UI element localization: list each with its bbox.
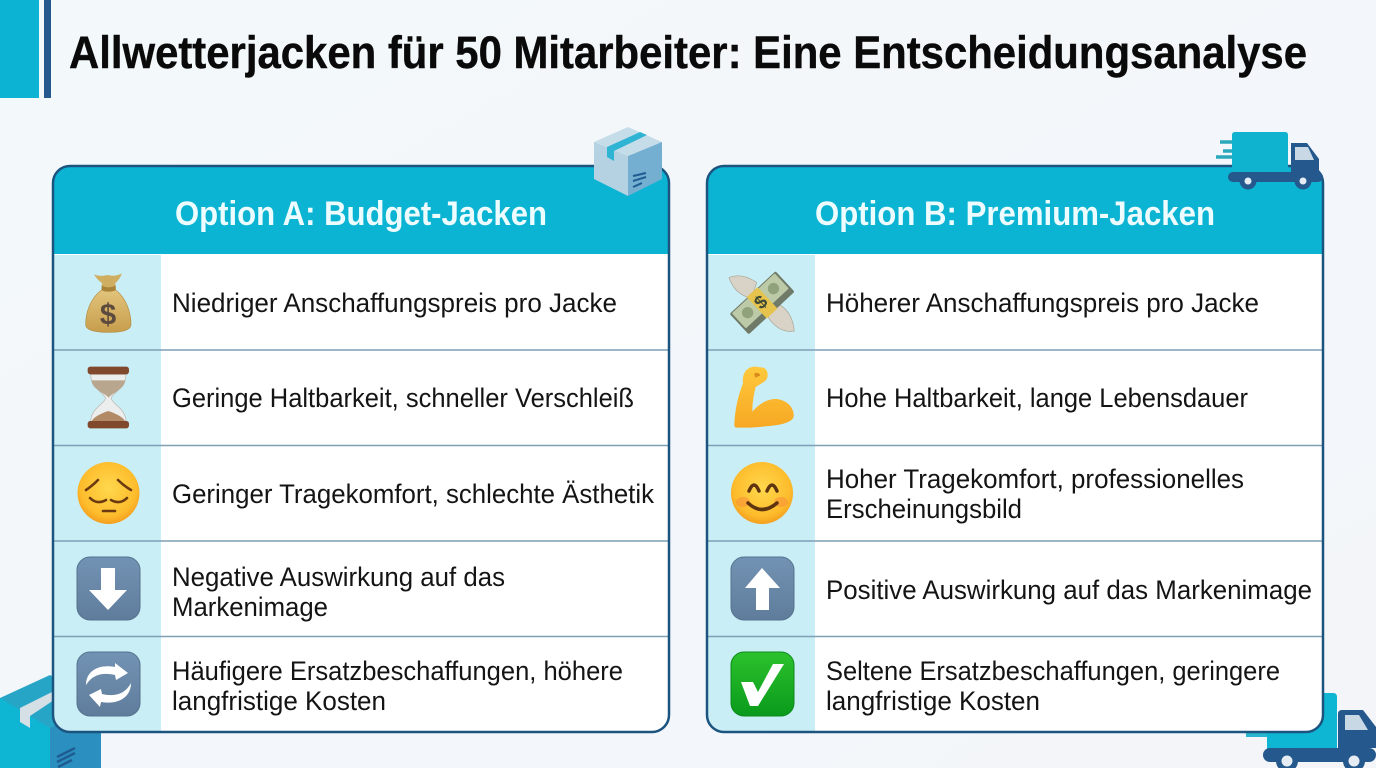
row text: Positive Auswirkung auf das Markenimage bbox=[826, 575, 1312, 605]
row text: Hohe Haltbarkeit, lange Lebensdauer bbox=[826, 383, 1248, 413]
icon: money bag: $ bbox=[100, 299, 116, 332]
row B1 bbox=[729, 271, 1259, 335]
row text: Geringe Haltbarkeit, schneller Verschleiß bbox=[172, 383, 634, 413]
icon: flying money bbox=[729, 271, 795, 335]
row A4 bbox=[77, 557, 505, 622]
row text: Hoher Tragekomfort, professionelles bbox=[826, 464, 1244, 494]
icon: up arrow tile bbox=[731, 557, 794, 620]
panel A header bbox=[53, 166, 669, 254]
icon: truck top bbox=[1216, 132, 1323, 190]
panel B header bbox=[707, 166, 1323, 254]
title accent bars bbox=[0, 0, 51, 98]
panel B icon column bbox=[707, 255, 815, 732]
panel B heading: Option B: Premium-Jacken bbox=[815, 195, 1215, 233]
row B5: langfristige Kosten bbox=[826, 686, 1040, 716]
title: Allwetterjacken für 50 Mitarbeiter: Eine Entscheidungsanalyse bbox=[69, 27, 1307, 78]
icon: refresh tile bbox=[77, 652, 140, 716]
icon: green check tile bbox=[731, 652, 794, 716]
row B4 bbox=[731, 557, 1312, 620]
icon: smiling face bbox=[731, 462, 793, 524]
panel A icon column bbox=[53, 255, 161, 732]
row B3: Erscheinungsbild bbox=[826, 494, 1022, 524]
icon: sad face bbox=[78, 462, 140, 524]
row text: Höherer Anschaffungspreis pro Jacke bbox=[826, 288, 1259, 318]
row A5: langfristige Kosten bbox=[172, 686, 386, 716]
icon: truck bottom right bbox=[1246, 693, 1376, 768]
panel: Option A bbox=[53, 166, 669, 732]
row text: Häufigere Ersatzbeschaffungen, höhere bbox=[172, 656, 623, 686]
icon: money bag bbox=[86, 273, 131, 332]
icon: hourglass bbox=[88, 367, 129, 428]
panel A heading: Option A: Budget-Jacken bbox=[175, 195, 547, 233]
icon: box top bbox=[594, 127, 662, 196]
row text: Niedriger Anschaffungspreis pro Jacke bbox=[172, 288, 617, 318]
icon: down arrow tile bbox=[77, 557, 140, 620]
row A3 bbox=[78, 462, 654, 524]
row text: Negative Auswirkung auf das bbox=[172, 562, 505, 592]
row A5 bbox=[77, 652, 623, 716]
row text: Geringer Tragekomfort, schlechte Ästhetik bbox=[172, 479, 654, 509]
row B3 bbox=[731, 462, 1244, 524]
icon: box bottom left bbox=[0, 675, 101, 768]
row text: Seltene Ersatzbeschaffungen, geringere bbox=[826, 656, 1280, 686]
row A4: Markenimage bbox=[172, 592, 328, 622]
row A2 bbox=[88, 367, 634, 428]
row A1 bbox=[86, 273, 617, 332]
icon: flying money: $ bbox=[750, 290, 772, 313]
row B2 bbox=[734, 367, 1248, 428]
row B5 bbox=[731, 652, 1280, 716]
panel: Option B bbox=[707, 166, 1323, 732]
icon: flexed arm bbox=[734, 367, 794, 428]
